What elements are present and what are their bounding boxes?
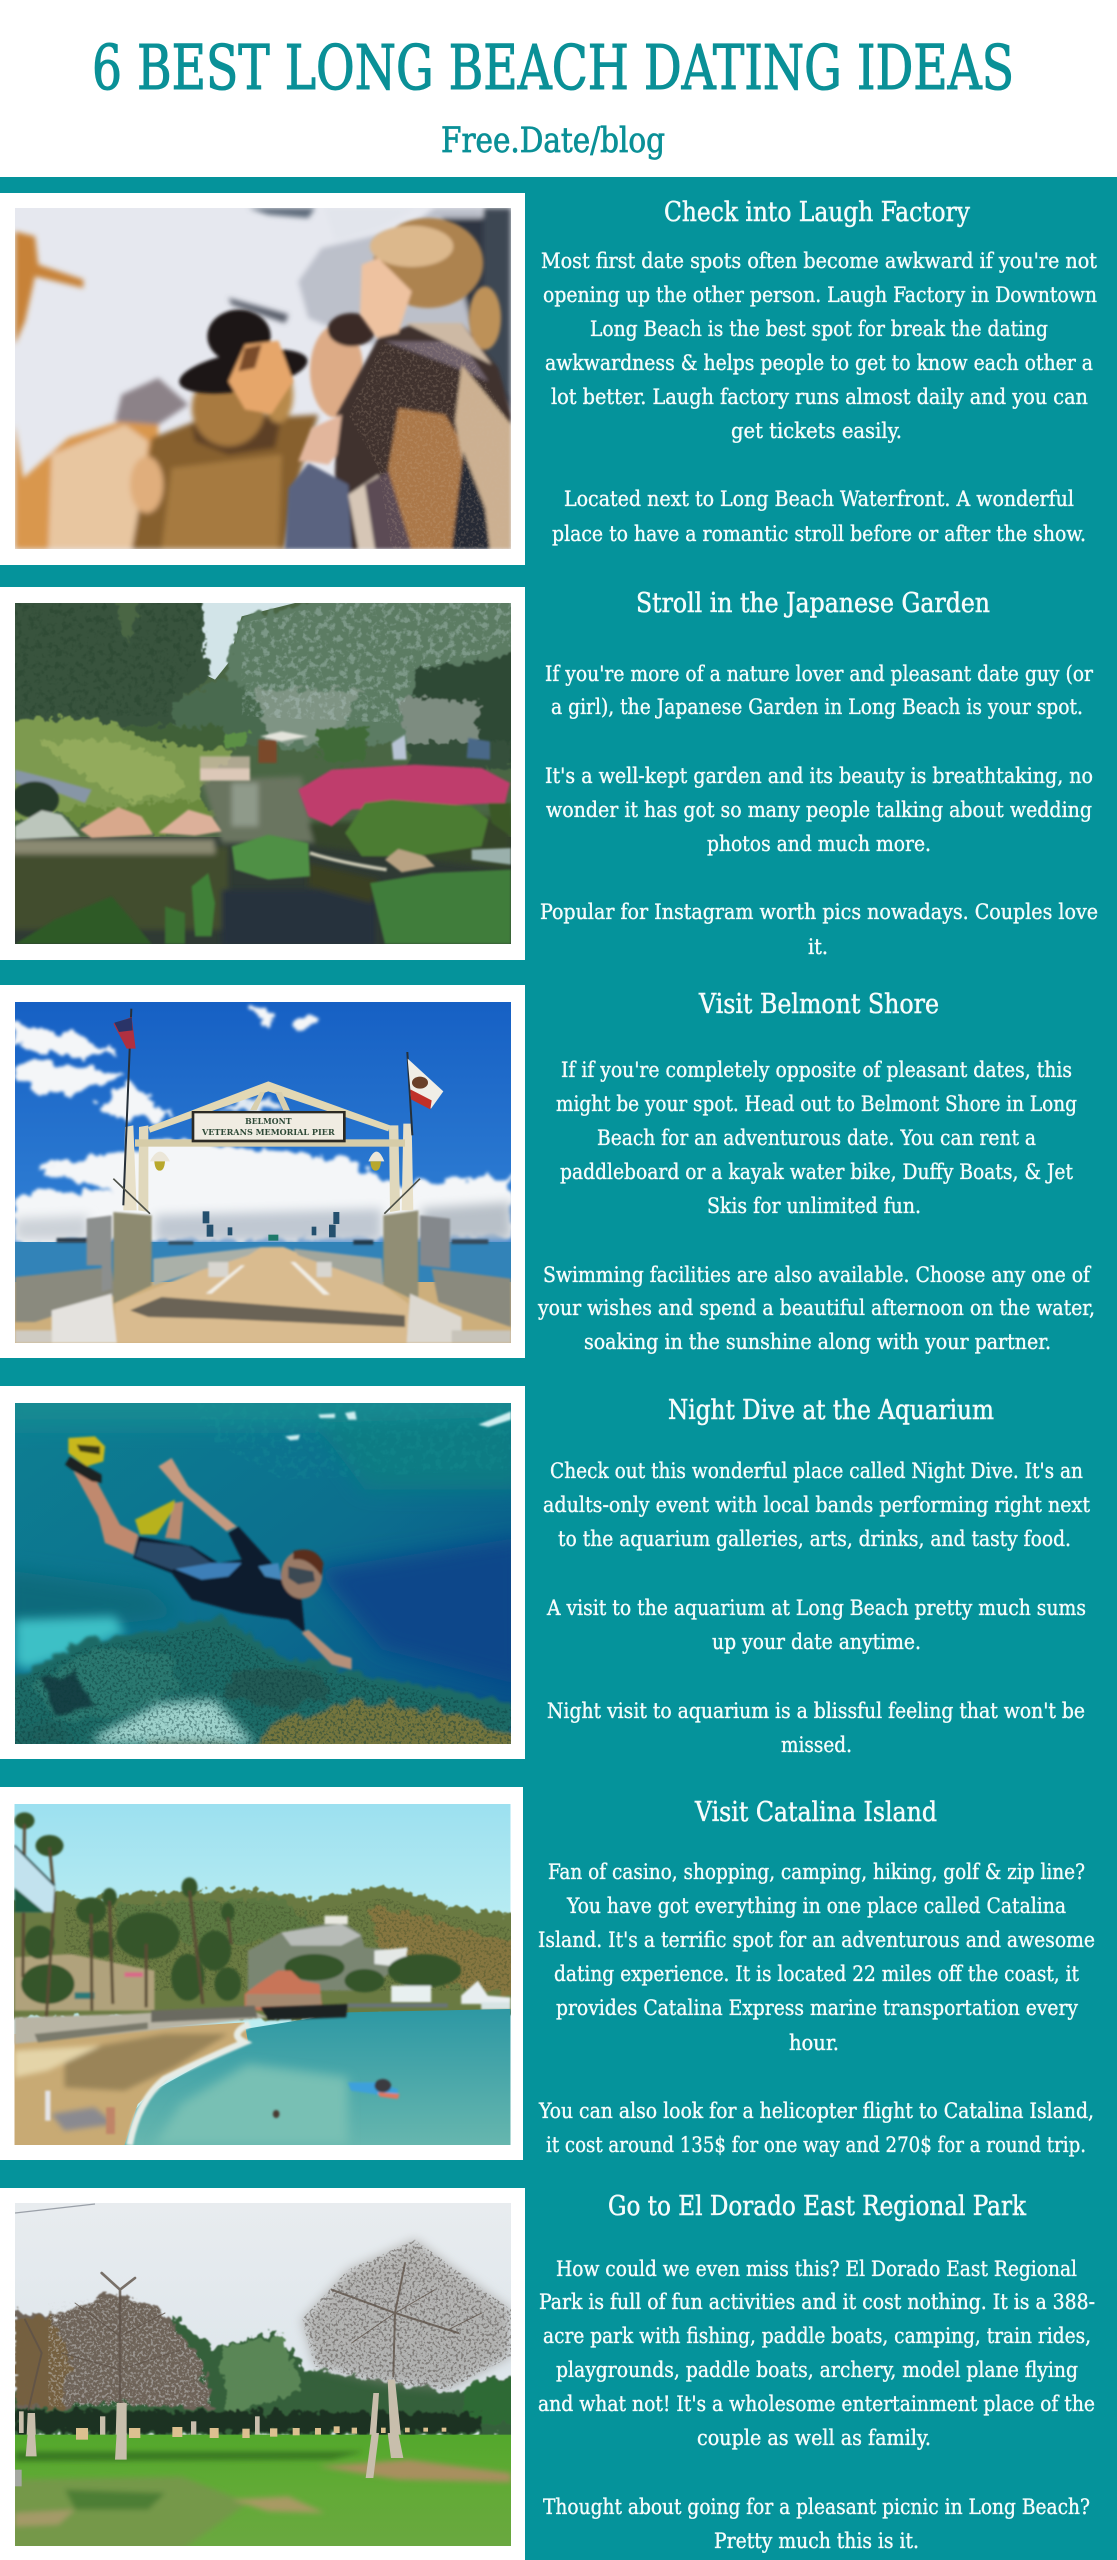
body text xyxy=(540,662,1098,959)
body text: couple as well as family. xyxy=(697,2426,931,2450)
panel: Night Dive xyxy=(0,1386,1090,1759)
body text: place to have a romantic stroll before or after the show. xyxy=(552,522,1086,546)
body text: Check out this wonderful place called Night Dive. It's an xyxy=(550,1459,1083,1483)
bare trees xyxy=(15,2293,212,2410)
body text: opening up the other person. Laugh Factory in Downtown xyxy=(543,283,1097,307)
body text: If if you're completely opposite of pleasant dates, this xyxy=(561,1058,1072,1082)
american flag xyxy=(113,1017,136,1049)
body text: Park is full of fun activities and it cost nothing. It is a 388- xyxy=(539,2290,1095,2314)
body text: A visit to the aquarium at Long Beach pretty much sums xyxy=(546,1596,1086,1620)
body text: it. xyxy=(808,935,828,959)
hills xyxy=(8,1884,521,2017)
reef xyxy=(2,1616,515,1756)
body text: Popular for Instagram worth pics nowadays. Couples love xyxy=(540,900,1098,924)
wetsuit xyxy=(133,1526,305,1633)
promenade and pier xyxy=(14,2003,448,2145)
legs xyxy=(73,1471,138,1555)
flag poles xyxy=(123,1009,412,1205)
panel: El Dorado Park xyxy=(0,2188,1095,2560)
white header background xyxy=(0,0,1117,177)
heading: Visit Catalina Island xyxy=(694,1797,937,1828)
body text: You have got everything in one place called Catalina xyxy=(566,1894,1066,1918)
body text: a girl), the Japanese Garden in Long Beach is your spot. xyxy=(551,695,1083,719)
photo card: Belmont pier xyxy=(0,985,525,1358)
body text: provides Catalina Express marine transportation every xyxy=(556,1996,1078,2020)
body text: get tickets easily. xyxy=(731,419,902,443)
body text: photos and much more. xyxy=(707,832,931,856)
body text: awkwardness & helps people to get to know each other a xyxy=(545,351,1093,375)
arm lower xyxy=(302,1630,352,1670)
body text xyxy=(541,249,1097,546)
body text: missed. xyxy=(781,1733,852,1757)
body text: Beach for an adventurous date. You can rent a xyxy=(597,1126,1036,1150)
snorkeler xyxy=(65,1436,352,1670)
heading: Stroll in the Japanese Garden xyxy=(636,588,990,619)
body text: Located next to Long Beach Waterfront. A wonderful xyxy=(564,487,1074,511)
far lamp posts xyxy=(203,1211,339,1241)
tree line xyxy=(8,2316,522,2436)
body text: wonder it has got so many people talking about wedding xyxy=(546,798,1092,822)
head xyxy=(281,1551,322,1599)
body text: Skis for unlimited fun. xyxy=(707,1194,921,1218)
lamps xyxy=(150,1152,384,1161)
subtitle: Free.Date/blog xyxy=(441,121,665,161)
body text: Swimming facilities are also available. Choose any one of xyxy=(543,1263,1092,1287)
palms xyxy=(14,1812,461,2004)
beach xyxy=(14,2022,248,2145)
targets xyxy=(76,2426,446,2440)
body text: Thought about going for a pleasant picnic in Long Beach? xyxy=(543,2495,1090,2519)
photo card: Japanese garden pond xyxy=(0,587,525,960)
body text: hour. xyxy=(789,2031,839,2055)
photo card: friends laughing xyxy=(0,193,525,565)
photo card: Avalon bay xyxy=(0,1787,523,2160)
body text xyxy=(543,1459,1090,1757)
town xyxy=(14,1812,510,2021)
lawn xyxy=(15,2435,511,2546)
photo card: park lawn and trees xyxy=(0,2188,525,2560)
panel: Catalina Island xyxy=(0,1787,1095,2160)
body text: Night visit to aquarium is a blissful feeling that won't be xyxy=(547,1699,1085,1723)
water xyxy=(15,837,511,944)
body text: Most first date spots often become awkward if you're not xyxy=(541,249,1097,273)
heading: Check into Laugh Factory xyxy=(664,197,970,228)
tree canopy dappling xyxy=(242,603,511,723)
sea xyxy=(108,2009,510,2145)
garden details xyxy=(11,731,511,944)
body text: Fan of casino, shopping, camping, hiking, golf & zip line? xyxy=(548,1860,1085,1884)
pier sign xyxy=(192,1111,346,1142)
heading: Visit Belmont Shore xyxy=(698,989,939,1020)
body text: lot better. Laugh factory runs almost daily and you can xyxy=(551,385,1088,409)
arch xyxy=(123,1081,413,1212)
body text: acre park with fishing, paddle boats, camping, train rides, xyxy=(543,2324,1091,2348)
body text: soaking in the sunshine along with your partner. xyxy=(584,1330,1051,1354)
sea xyxy=(15,1242,511,1282)
body text: It's a well-kept garden and its beauty is breathtaking, no xyxy=(545,764,1093,788)
body text: How could we even miss this? El Dorado East Regional xyxy=(556,2257,1077,2281)
body text: it cost around 135$ for one way and 270$ for a round trip. xyxy=(546,2133,1086,2157)
body text: adults-only event with local bands performing right next xyxy=(543,1493,1090,1517)
heading: Go to El Dorado East Regional Park xyxy=(608,2191,1026,2222)
body text: dating experience. It is located 22 miles off the coast, it xyxy=(554,1962,1079,1986)
panel: Japanese Garden xyxy=(0,587,1098,960)
arm xyxy=(158,1458,237,1531)
fins xyxy=(68,1436,105,1466)
body text: might be your spot. Head out to Belmont Shore in Long xyxy=(556,1092,1077,1116)
pier sign: BELMONT xyxy=(245,1117,292,1127)
body text: up your date anytime. xyxy=(712,1630,921,1654)
body text xyxy=(538,2257,1095,2553)
body text: and what not! It's a wholesome entertainment place of the xyxy=(538,2392,1095,2416)
body text: paddleboard or a kayak water bike, Duffy Boats, & Jet xyxy=(560,1160,1073,1184)
trunks xyxy=(19,2380,403,2478)
deck xyxy=(115,1247,408,1343)
body text: Long Beach is the best spot for break the dating xyxy=(590,317,1048,341)
panel: Laugh Factory xyxy=(0,193,1097,565)
body text: Pretty much this is it. xyxy=(714,2529,919,2553)
body text: You can also look for a helicopter flight to Catalina Island, xyxy=(538,2099,1094,2123)
body text: your wishes and spend a beautiful afternoon on the water, xyxy=(537,1296,1095,1320)
california flag xyxy=(408,1059,443,1109)
body text: Island. It's a terrific spot for an adventurous and awesome xyxy=(538,1928,1095,1952)
body text xyxy=(538,1860,1095,2157)
body text: playgrounds, paddle boats, archery, model plane flying xyxy=(556,2358,1078,2382)
heading: Night Dive at the Aquarium xyxy=(668,1395,994,1426)
pier sign: VETERANS MEMORIAL PIER xyxy=(201,1128,335,1138)
body text: If you're more of a nature lover and pleasant date guy (or xyxy=(545,662,1094,686)
trunks over lawn xyxy=(26,2433,403,2478)
building awning xyxy=(14,1846,54,1912)
photo card: snorkeler over reef xyxy=(0,1386,525,1759)
panel: Belmont Shore xyxy=(0,985,1095,1358)
body text: to the aquarium galleries, arts, drinks, and tasty food. xyxy=(558,1527,1071,1551)
body text xyxy=(537,1058,1095,1354)
